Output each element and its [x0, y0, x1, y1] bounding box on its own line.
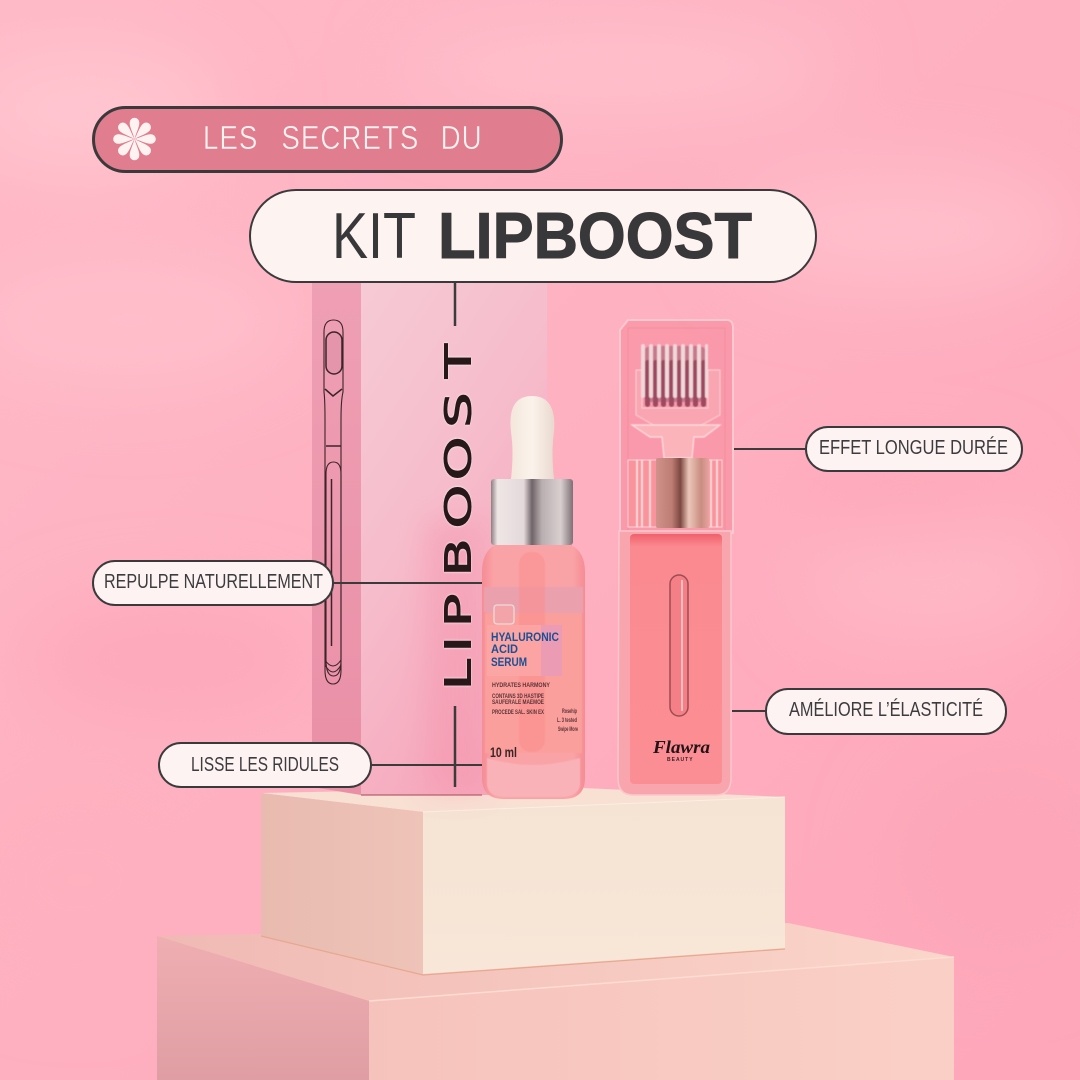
header pill: les secrets du [94, 108, 562, 172]
box side lip-roller line art [324, 320, 343, 684]
serum bottle: 10 ml [490, 744, 517, 760]
collar [628, 460, 722, 527]
transparent upper case [620, 320, 733, 533]
serum bottle: CONTAINS 3D HASTIPE [492, 694, 544, 700]
body [618, 531, 731, 795]
label text: ACID [491, 644, 518, 656]
window slot [670, 575, 688, 716]
title text: LIPBOOST [438, 199, 752, 272]
serum bottle [482, 396, 585, 799]
label text: SERUM [491, 657, 527, 669]
callout: lisse les ridules: LISSE LES RIDULES [191, 754, 339, 776]
callout: ameliore l'elasticite [766, 689, 1006, 734]
icon: flower [113, 118, 156, 160]
header text: LES SECRETS DU [203, 120, 483, 157]
box vertical brand name: LIPBOOST [438, 344, 480, 690]
serum bottle: L. 3 tested [557, 718, 577, 724]
label text: HYALURONIC [491, 632, 559, 644]
brand name: Flawra [652, 737, 710, 757]
serum bottle: Swipe More [558, 727, 578, 733]
title pill: kit lipboost [250, 190, 816, 282]
connector lines [333, 282, 806, 787]
callout: effet longue duree: EFFET LONGUE DURÉE [819, 436, 1008, 459]
silver cap [491, 479, 573, 545]
serum bottle: PROCEDE SAL. SKIN EX [492, 710, 544, 716]
label text [491, 632, 559, 669]
serum bottle: SAUFERALE MAEMOE [492, 700, 544, 706]
roller neck [632, 425, 720, 458]
copper ferrule [656, 458, 709, 528]
serum bottle: Rosehip [562, 709, 577, 715]
callout: repulpe naturellement: REPULPE NATURELLEMENT [104, 571, 323, 593]
roller head [636, 344, 720, 426]
microneedle roller [618, 320, 733, 795]
callout: lisse les ridules [159, 743, 371, 787]
callout: repulpe naturellement [93, 561, 333, 605]
product box [312, 283, 547, 795]
title text: KIT [332, 199, 416, 272]
callout: ameliore l'elasticite: AMÉLIORE L’ÉLASTICITÉ [789, 698, 983, 721]
podium: lower block [157, 923, 954, 1080]
dropper bulb [510, 396, 554, 479]
podium: upper block [261, 787, 785, 975]
serum bottle: HYDRATES HARMONY [492, 683, 550, 689]
label panel [487, 625, 562, 676]
glass body [482, 545, 585, 799]
microneedle roller: BEAUTY [667, 757, 694, 763]
callout: effet longue duree [806, 427, 1022, 471]
